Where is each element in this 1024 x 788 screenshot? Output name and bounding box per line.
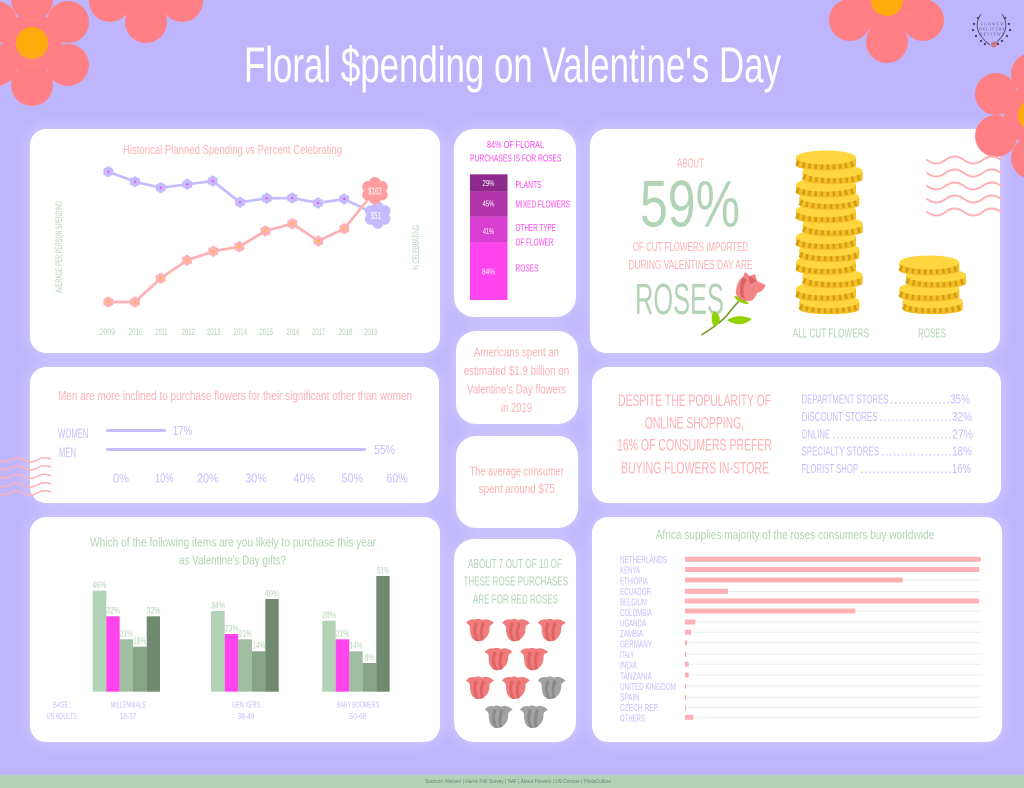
year axis labels: 2012: [182, 327, 195, 338]
decorative flower: top left: [0, 0, 89, 106]
pink series: average spending: [103, 191, 375, 308]
year axis labels: [100, 327, 378, 338]
year axis labels: 2017: [312, 327, 325, 338]
stacked bar legend: OTHER TYPE: [516, 222, 556, 234]
stacked bar: 29%: [482, 179, 494, 188]
country bars: [685, 557, 981, 720]
year axis labels: 2010: [128, 327, 142, 338]
bars: gen xers: 23%: [225, 623, 239, 633]
store type list: [802, 392, 973, 476]
heading: THESE ROSE PURCHASES: [464, 575, 568, 589]
heading: as Valentine's Day gifts?: [179, 552, 286, 567]
bars: millennials: 18%: [133, 636, 146, 646]
bars: gen xers: 14%: [252, 641, 265, 651]
bars: millennials: 32%: [106, 606, 120, 616]
heading: Men are more inclined to purchase flowers for their significant other than women: [58, 389, 412, 403]
store type list: .......................: [860, 462, 952, 476]
group labels: [46, 700, 379, 721]
stacked bar legend: ROSES: [516, 263, 538, 275]
bars: gen xers: 34%: [211, 600, 225, 610]
group labels: US ADULTS: [46, 711, 77, 721]
women bar: 17%: [173, 423, 193, 438]
country labels: UNITED KINGDOM: [620, 681, 676, 693]
percent axis: 20%: [197, 471, 219, 486]
panel card: [590, 129, 1000, 353]
callout text: estimated $1.9 billion on: [464, 364, 569, 378]
women bar: WOMEN: [58, 426, 88, 441]
callout: 162 dollars flower: [362, 177, 388, 204]
country labels: TANZANIA: [620, 670, 652, 682]
panel card: [30, 129, 440, 353]
country labels: ECUADOR: [620, 586, 651, 598]
country labels: KENYA: [620, 565, 640, 577]
store type list: 32%: [952, 410, 972, 424]
decorative waves: left edge: [0, 458, 50, 495]
year axis labels: 2016: [286, 327, 300, 338]
callout text: The average consumer: [470, 465, 564, 479]
panel: share of floral purchases stacked bar: [454, 129, 576, 317]
bars: baby boomers: 14%: [350, 641, 362, 651]
panel: average consumer callout: [456, 436, 578, 528]
store type list: 35%: [950, 392, 970, 406]
panel: red rose pictogram: [454, 539, 576, 742]
statement: 16% OF CONSUMERS PREFER: [617, 436, 772, 455]
percent axis: 60%: [386, 471, 408, 486]
panel: rose exporters bar chart: [592, 517, 1002, 742]
heading: ARE FOR RED ROSES: [473, 592, 558, 606]
logo: flower delivery reviews: [972, 14, 1011, 48]
logo: flower delivery reviews: DELIVERY: [979, 26, 1005, 32]
panel card: [454, 129, 576, 317]
country labels: ZAMBIA: [620, 628, 643, 640]
store type list: 27%: [952, 427, 973, 441]
panel card: [30, 367, 439, 503]
description: OF CUT FLOWERS IMPORTED: [633, 239, 748, 254]
icon: rose illustration: [702, 272, 766, 335]
bars: millennials: 32%: [146, 606, 160, 616]
store type list: ..................: [879, 410, 952, 424]
country labels: NETHERLANDS: [620, 554, 667, 566]
bars: millennials: 21%: [120, 629, 132, 639]
year axis labels: 2015: [260, 327, 273, 338]
callout text: [470, 465, 564, 496]
store type list: ..............................: [832, 427, 952, 441]
country labels: BELGIUM: [620, 596, 647, 608]
men bar: [59, 442, 395, 460]
logo: flower delivery reviews: FLOWER: [981, 22, 1003, 26]
stacked bar legend: PLANTS: [516, 179, 542, 191]
callout: 51 dollars flower: $51: [371, 211, 381, 222]
country labels: UGANDA: [620, 617, 646, 629]
bars: millennials: [92, 580, 160, 692]
panel: generational gift bar chart: [30, 517, 440, 742]
decorative flower: top centre left: [89, 0, 203, 43]
year axis labels: 2013: [207, 327, 220, 338]
panel: historical planned spending line chart: [30, 129, 440, 353]
group labels: GEN XERS: [232, 700, 260, 710]
panel card: [456, 436, 578, 528]
big statistic: 59%: [640, 167, 740, 241]
country labels: [620, 554, 676, 724]
callout: 51 dollars flower: [365, 201, 390, 229]
country labels: GERMANY: [620, 638, 652, 650]
year axis labels: 2018: [338, 327, 352, 338]
callout text: Americans spent an: [474, 346, 559, 360]
stacked bar legend: [516, 179, 570, 275]
bars: baby boomers: 8%: [364, 652, 374, 662]
bars: gen xers: [211, 588, 279, 692]
statement: [617, 391, 772, 477]
country labels: ETHIOPIA: [620, 575, 648, 587]
group labels: 38-49: [238, 711, 255, 721]
stacked bar: 41%: [483, 227, 494, 236]
store type list: SPECIALTY STORES: [802, 445, 879, 459]
percent axis: 40%: [294, 471, 315, 486]
callout text: Valentine's Day flowers: [467, 382, 566, 396]
description: DURING VALENTINES DAY ARE: [628, 257, 752, 272]
decorative flower: right edge: [975, 53, 1024, 179]
statement: BUYING FLOWERS IN-STORE: [621, 458, 769, 477]
panel card: [592, 367, 1001, 503]
callout text: spent around $75: [479, 482, 555, 496]
country labels: ITALY: [620, 649, 634, 661]
left axis label: AVERAGE PER PERSON SPENDING: [54, 201, 64, 293]
panel: 59 percent of imported cut flowers: [590, 129, 1000, 353]
heading: Which of the following items are you likely to purchase this year: [90, 535, 377, 550]
group labels: BASE:: [53, 700, 70, 710]
heading: PURCHASES IS FOR ROSES: [470, 152, 562, 164]
percent axis: [113, 471, 408, 486]
country labels: COLOMBIA: [620, 607, 652, 619]
store type list: ..................: [881, 445, 952, 459]
footer band with sources: Sources: Nielsen | Harris Poll Survey | SAF | About Flowers | US Census | PilotaCulture: [425, 779, 611, 785]
logo: flower delivery reviews: REVIEWS: [980, 32, 1004, 36]
coin stack: roses: [899, 256, 966, 314]
stacked bar legend: OF FLOWER: [516, 237, 554, 249]
country labels: OTHERS: [620, 712, 645, 724]
country labels: CZECH REP.: [620, 702, 659, 714]
bars: gen xers: 40%: [265, 588, 279, 598]
coin stack labels: ALL CUT FLOWERS: [793, 327, 869, 341]
coin stack labels: ROSES: [918, 327, 946, 341]
percent axis: 50%: [342, 471, 363, 486]
store type list: DEPARTMENT STORES: [802, 392, 888, 406]
group labels: 18-37: [120, 711, 137, 721]
store type list: 18%: [952, 445, 972, 459]
bars: baby boomers: 28%: [322, 610, 336, 620]
year axis labels: 2019: [364, 327, 378, 338]
footer band with sources: [0, 775, 1024, 788]
men bar: 55%: [374, 442, 395, 457]
right axis label: % CELEBRATING: [411, 225, 421, 270]
bars: baby boomers: 21%: [336, 629, 349, 639]
heading: [90, 535, 377, 567]
callout text: in 2019: [501, 401, 532, 415]
panel card: [454, 539, 576, 742]
percent axis: 30%: [245, 471, 267, 486]
year axis labels: 2014: [234, 327, 247, 338]
roses word: ROSES: [635, 275, 724, 324]
heading: Africa supplies majority of the roses consumers buy worldwide: [656, 527, 934, 542]
panel card: [30, 517, 440, 742]
year axis labels: 2009: [100, 327, 115, 338]
panel card: [456, 331, 578, 424]
callout text: [464, 346, 569, 415]
about label: ABOUT: [677, 157, 704, 171]
panel: in-store buying: [592, 367, 1001, 503]
statement: DESPITE THE POPULARITY OF: [618, 391, 771, 410]
women bar: [58, 423, 193, 441]
heading: 84% OF FLORAL: [487, 139, 544, 151]
coin stack: all cut flowers: [796, 150, 863, 314]
statement: ONLINE SHOPPING,: [645, 414, 744, 433]
group labels: BABY BOOMERS: [337, 700, 379, 710]
heading: [470, 139, 562, 164]
stacked bar: 84%: [482, 268, 495, 276]
men bar: MEN: [59, 445, 76, 460]
icons: seven red roses and three grey roses: [466, 619, 566, 728]
stacked bar legend: MIXED FLOWERS: [516, 199, 570, 211]
percent axis: 0%: [113, 471, 129, 486]
description: [628, 239, 752, 272]
decorative flower: top right: [829, 0, 944, 63]
store type list: DISCOUNT STORES: [802, 410, 878, 424]
group labels: 50-68: [350, 711, 367, 721]
group labels: MILLENNIALS: [111, 700, 146, 710]
purple series: percent celebrating: [103, 166, 377, 215]
store type list: FLORIST SHOP: [802, 462, 858, 476]
store type list: ...............: [890, 392, 950, 406]
heading: [464, 557, 568, 606]
bars: baby boomers: [322, 565, 390, 692]
panel: men vs women bar chart: [30, 367, 439, 503]
title: Floral $pending on Valentine's Day: [244, 37, 781, 93]
bars: gen xers: 21%: [239, 629, 252, 639]
decorative waves: top right panel: [927, 156, 1001, 216]
stacked bar: [470, 174, 508, 300]
heading: ABOUT 7 OUT OF 10 OF: [468, 557, 562, 571]
country labels: INDIA: [620, 660, 637, 672]
callout: 162 dollars flower: $162: [368, 186, 382, 198]
panel: total spending callout: [456, 331, 578, 424]
chart heading: Historical Planned Spending vs Percent Celebrating: [123, 142, 342, 157]
country labels: SPAIN: [620, 691, 639, 703]
stacked bar: 45%: [482, 200, 494, 208]
bars: baby boomers: 51%: [377, 565, 389, 575]
percent axis: 10%: [155, 471, 174, 486]
year axis labels: 2011: [156, 327, 168, 338]
bars: millennials: 46%: [92, 580, 106, 590]
store type list: 16%: [952, 462, 971, 476]
panel card: [592, 517, 1002, 742]
store type list: ONLINE: [802, 427, 830, 441]
